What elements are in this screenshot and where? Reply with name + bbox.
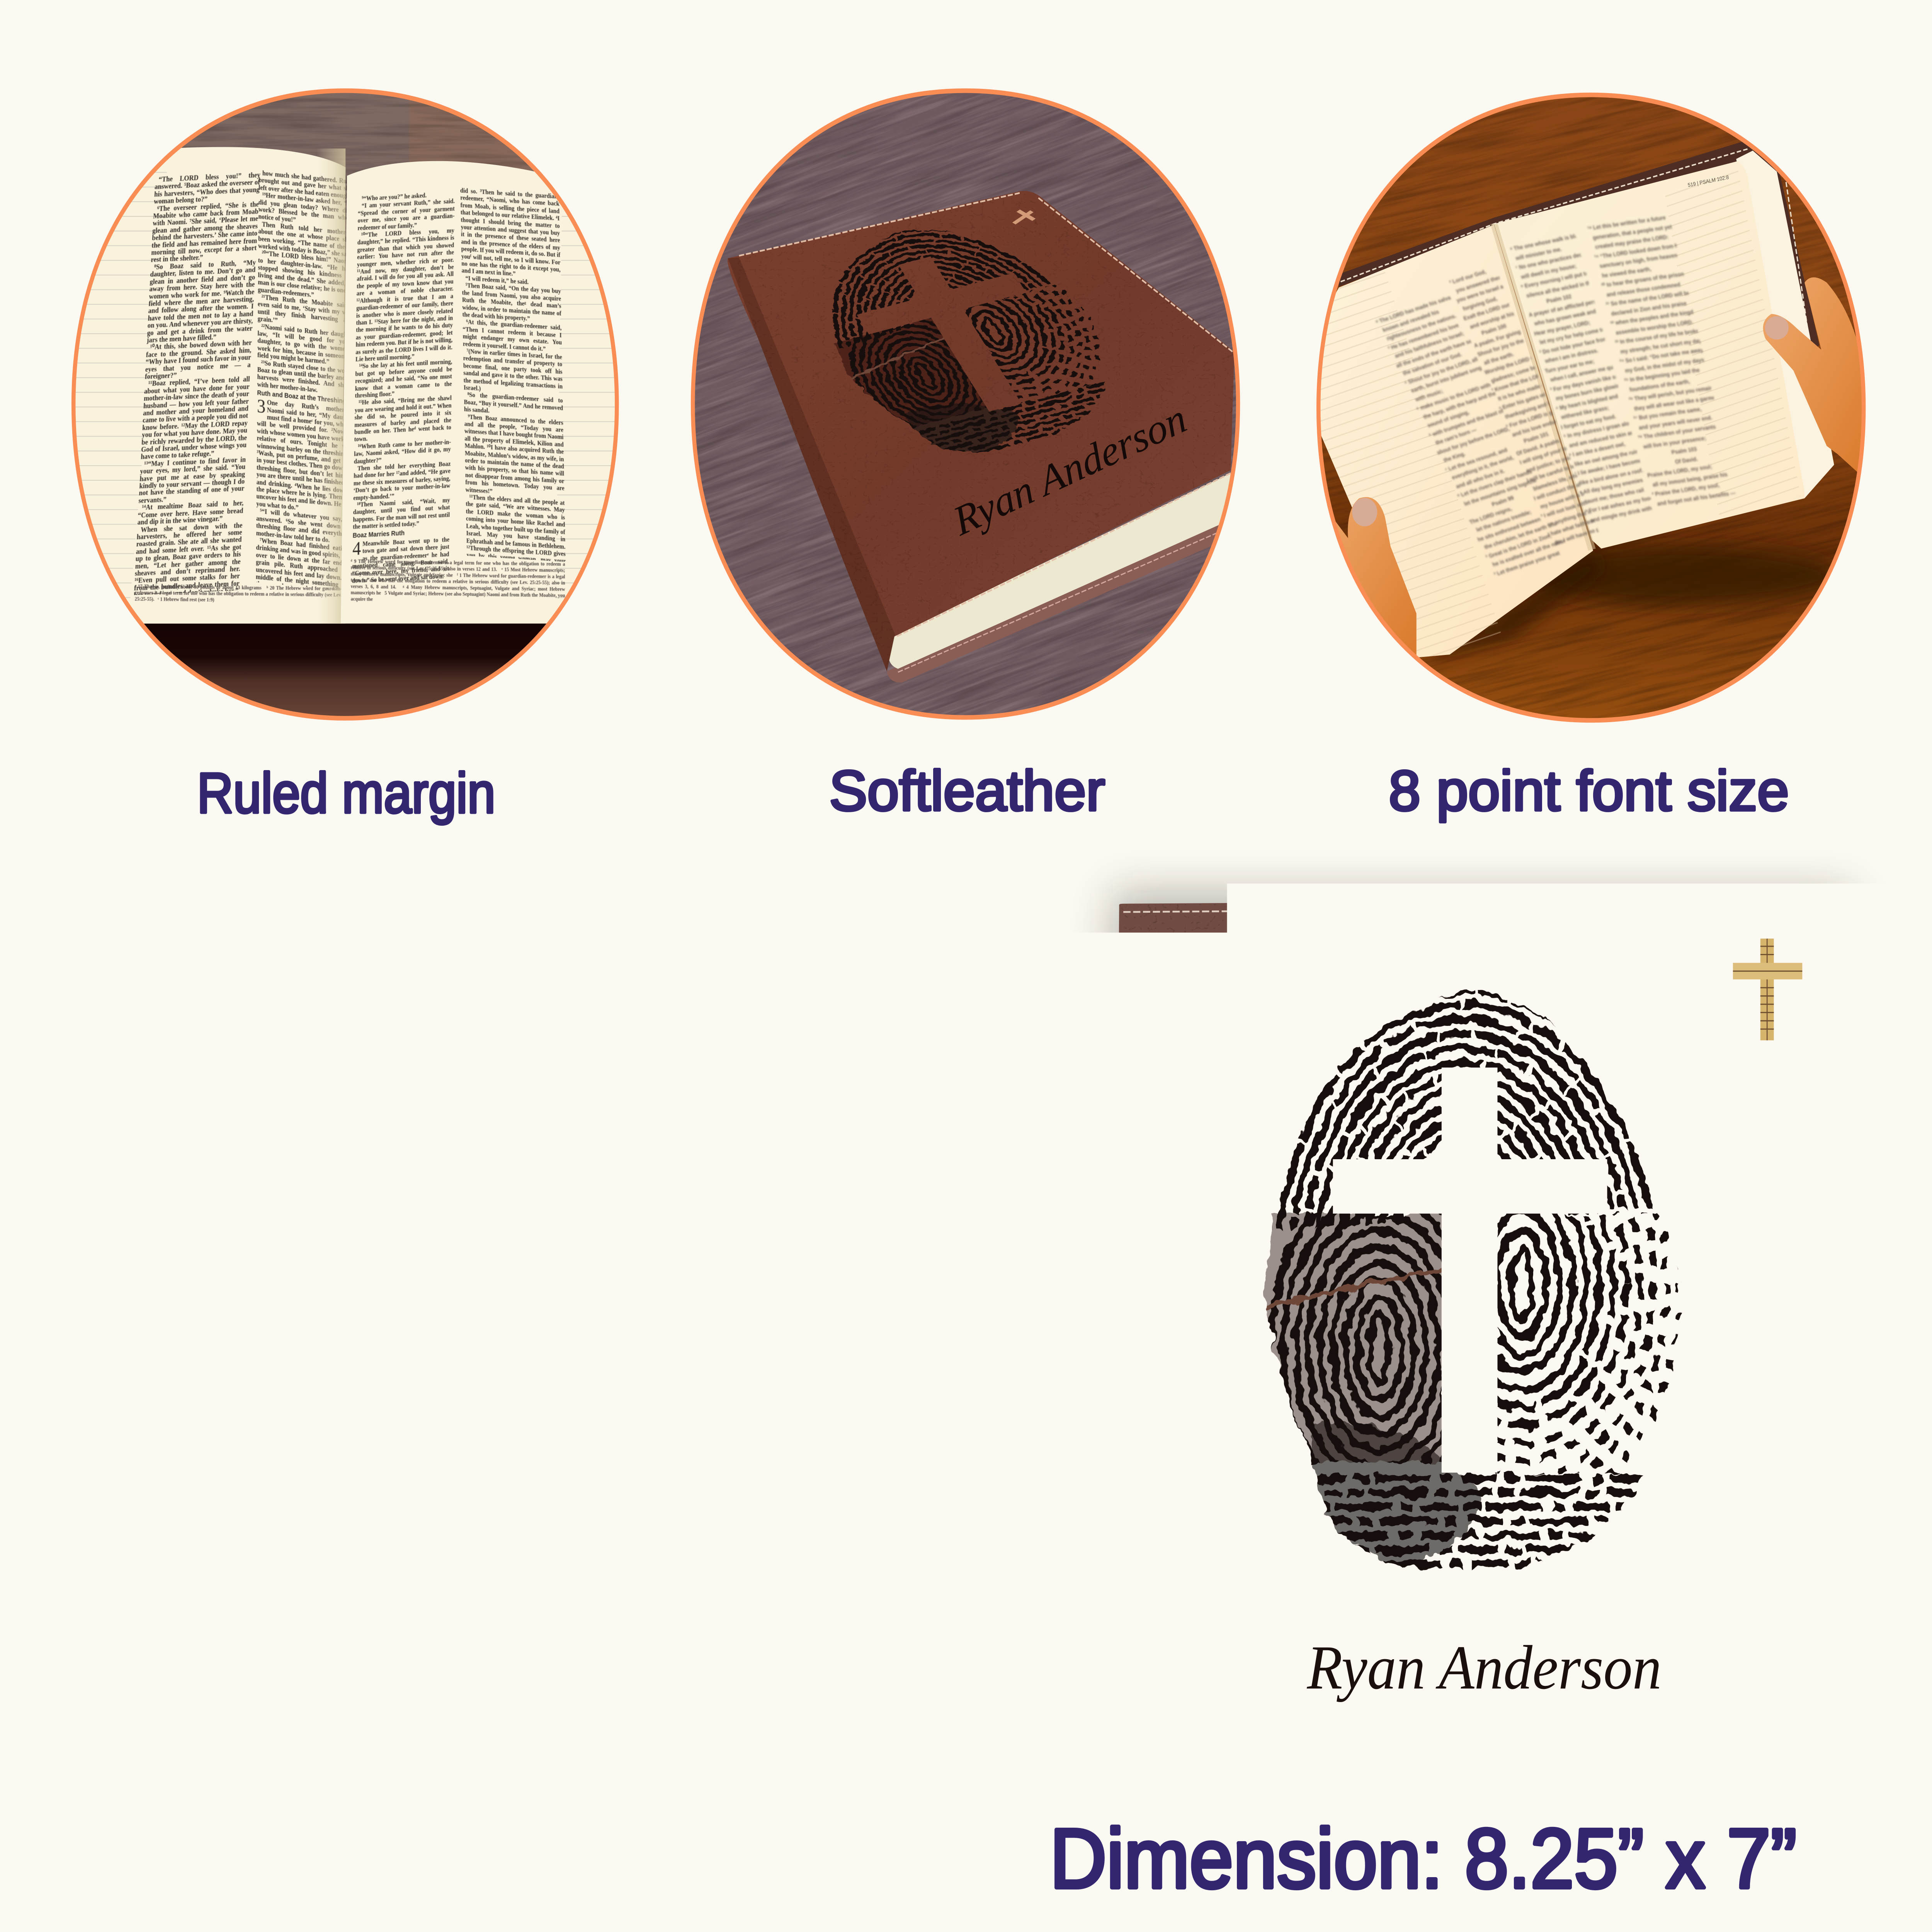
dimension label: Dimension: 8.25” x 7” (1050, 1812, 1797, 1906)
main leather book (1103, 893, 1853, 1780)
gold cross (1733, 939, 1802, 1040)
column A psalm text: let the nations tremble; (1475, 509, 1532, 533)
column B psalm text: ⁵ For the LORD is good (1505, 406, 1562, 430)
column D psalm text: and release those condemned (1606, 281, 1681, 298)
column B psalm text: all the earth. (1483, 350, 1515, 366)
right page footnotes: ᵈ 9 The Hebrew word for guardian-redeemer is a legal term for one who has the obligation to redeem a relative in serious difficulty (see Lev. 25:25-55); also in verses 12 and 13. ᵉ 15 Most Hebrew manuscripts; many Hebrew manuscripts, Vulgate and Syriac she ᶠ 1 The Hebrew word for guardian-redeemer is a legal term for one who has the obligation to redeem a relative in serious difficulty (see Lev. 25:25-55); also in verses 3, 6, 8 and 14. ᵍ 4 Many Hebrew manuscripts, Septuagint, Vulgate and Syriac; most Hebrew manuscripts he 5 Vulgate and Syriac; Hebrew (see also Septuagint) Naomi and from Ruth the Moabite, you acquire the (351, 558, 565, 602)
photo circle: softleather (554, 0, 1374, 869)
column A psalm text: all the ends of the earth have seen (1395, 335, 1479, 369)
column B psalm text: you answered them; (1454, 272, 1505, 294)
column C psalm text: will minister to me. (1515, 245, 1562, 261)
column three text (352, 190, 465, 585)
column D psalm text: all my inmost being, praise his (1652, 471, 1728, 488)
column A psalm text: sound of singing, (1426, 409, 1470, 429)
column B psalm text: I will be careful to lead a (1526, 459, 1585, 484)
photo circle: 8 point font size (1196, 0, 1932, 860)
column three text: Meanwhile Boaz went up to the town gate and sat down there just as the guardian-redeemerᵉ he had mentioned came along. Boaz said, “Come over here, my friend, and sit down.” So he went over and sat down. (352, 536, 449, 585)
column C psalm text: ³ For my days vanish like smoke; (1549, 370, 1631, 393)
column A psalm text: ⁴ Shout for joy to the LORD, all the (1403, 352, 1488, 386)
leather cover strip (1339, 140, 1819, 354)
column two text: ⁵“I will do whatever you say,” Ruth answered. ⁶So she went down to the threshing floor and did everything her mother-in-law told her to do. (256, 508, 362, 544)
column C psalm text: ⁵ In my distress I groan aloud (1563, 418, 1636, 440)
column three text: Then she told her everything Boaz had done for her ¹⁷and added, “He gave me these six measures of barley, saying, ‘Don’t go back to your mother-in-law empty-handed.’” (353, 460, 451, 502)
column A psalm text: everything in it, the world, (1451, 454, 1515, 481)
column B psalm text: Of David. A psalm. (1515, 437, 1561, 457)
caption: softleather: Softleather (829, 759, 1105, 823)
column A psalm text: the salvation of our God. (1401, 351, 1463, 376)
column A psalm text: he is exalted over all the nations. (1491, 536, 1572, 568)
column three text: ¹⁵He also said, “Bring me the shawl you are wearing and hold it out.” When she did so, he poured into it six measures of barley and placed the bundle on her. Then heᵈ went back to town. (354, 395, 452, 443)
leather texture (1103, 893, 1853, 1780)
column C psalm text: ⁷ I lie awake; I have become (1573, 457, 1642, 477)
column one text: ¹⁴At mealtime Boaz said to her, “Come over here. Have some bread and dip it in the wine vinegar.” (137, 499, 244, 526)
column two text: Ruth and Boaz at the Threshing Floor (257, 389, 362, 407)
column A psalm text: The LORD reigns, (1468, 505, 1513, 525)
column B psalm text: ² Lord our God, (1448, 268, 1487, 286)
column D psalm text: assemble to worship the LORD. (1615, 318, 1694, 336)
column B psalm text: gladness; come before him (1490, 357, 1557, 384)
column B psalm text: Worship the LORD with (1483, 352, 1542, 376)
column two text: 3 (257, 395, 265, 417)
column B psalm text: ³ Know that the LORD is God. (1490, 366, 1563, 394)
column B psalm text: I will sing of your love (1519, 443, 1573, 466)
right thumbnail (1765, 316, 1789, 340)
page block (889, 473, 1231, 669)
orange ring (1318, 95, 1864, 720)
feature: journaling: Perfect for journaling (185, 1373, 1005, 1473)
column C psalm text: when I call, answer me quickly. (1549, 361, 1626, 383)
column three text: “I am your servant Ruth,” she said. “Spread the corner of your garment over me, since you are a guardian-redeemer of our family.” (357, 198, 455, 232)
column D psalm text: ¹⁸ Let this be written for a future (1587, 214, 1666, 231)
bullet three (111, 1404, 142, 1435)
column A psalm text: the ram’s horn — (1434, 426, 1478, 446)
column C psalm text: let my cry for help come to you. (1539, 323, 1617, 345)
engraved name: Ryan Anderson (947, 395, 1192, 545)
back cover (887, 521, 1223, 683)
column three text: ¹⁶When Ruth came to her mother-in-law, Naomi asked, “How did it go, my daughter?” (354, 439, 451, 465)
ruled margins (1316, 266, 1502, 658)
column A psalm text: known and revealed his (1381, 308, 1440, 333)
column D psalm text: ²⁴ So I said: “Do not take me away, (1619, 346, 1705, 365)
column A psalm text: ³ He has remembered his love (1387, 321, 1460, 351)
column C psalm text: ⁸ Every morning I will put to (1520, 270, 1589, 290)
column A psalm text: and his faithfulness to Israel; (1393, 330, 1465, 359)
column C psalm text: Turn your ear to me; (1544, 358, 1595, 374)
column C psalm text: my bones burn like glowing (1555, 381, 1624, 401)
column B psalm text: A psalm. For giving grateful (1473, 322, 1541, 349)
column four text: ⁵Then Boaz said, “On the day you buy the land from Naomi, you also acquire Ruth the Moabite, theᵍ dead man’s widow, in order to maintain the name of the dead with his property.” (462, 282, 561, 322)
column D psalm text: and forget not all his benefits — (1656, 489, 1736, 507)
column D psalm text: Praise the LORD, my soul; (1646, 463, 1713, 479)
column B psalm text: ⁴ Enter his gates with (1498, 389, 1551, 412)
column A psalm text: ⁵ make music to the LORD with (1415, 381, 1492, 412)
column D psalm text: Psalm 103 (1671, 446, 1697, 456)
column B psalm text: Psalm 100 (1480, 322, 1507, 336)
column two text (256, 170, 369, 593)
column A psalm text: let the mountains sing together; (1463, 475, 1541, 507)
column two text: ²¹Then Ruth the Moabite said, “He even said to me, ‘Stay with my workers until they finish harvesting all my grain.’” (258, 293, 363, 325)
column D psalm text: my God, in the midst of my days; (1624, 356, 1706, 374)
column three text: 4 (352, 537, 361, 559)
column D psalm text: will live in your presence; (1643, 434, 1707, 450)
column B psalm text: thanksgiving and his courts (1504, 393, 1573, 420)
column D psalm text: my strength; he cut short my days. (1619, 336, 1706, 355)
column D psalm text: ²² when the peoples and the kingdoms (1610, 307, 1704, 327)
photo circle: ruled margin (69, 86, 624, 723)
column B psalm text: Shout for joy to the LORD, (1476, 332, 1542, 358)
column C psalm text: Hear my prayer, LORD; (1533, 319, 1591, 337)
column D psalm text: ²⁷ But you remain the same, (1633, 406, 1702, 422)
page edge right (1736, 151, 1834, 498)
column A psalm text: the harp, with the harp and the (1422, 389, 1497, 420)
brown cover (724, 186, 1238, 676)
column D psalm text: generation, that a people not yet (1592, 223, 1672, 241)
column two text: ¹⁹Her mother-in-law asked her, “Where did you glean today? Where did you work? Blessed be the man who took notice of you!” (259, 191, 364, 224)
column two text: Then Ruth told her mother-in-law about the one at whose place she had been working. “The name of the man I worked with today is Boaz,” she said. (258, 220, 364, 259)
column D psalm text: ¹⁹ “The LORD looked down from his (1594, 241, 1683, 260)
column A psalm text: the cherubim, let the earth shake. (1483, 518, 1565, 550)
column A psalm text: ² Great is the LORD in Zion; (1485, 532, 1552, 560)
column B psalm text: Exalt the LORD our God (1463, 298, 1522, 321)
column three text: ¹⁰“The LORD bless you, my daughter,” he replied. “This kindness is greater than that which you showed earlier: You have not run after the younger men, whether rich or poor. ¹¹And now, my daughter, don’t be afraid. I will do for you all you ask. All the people of my town know that you are a woman of noble character. ¹²Although it is true that I am a guardian-redeemer of our family, there is another who is more closely related than I. ¹³Stay here for the night, and in the morning if he wants to do his duty as your guardian-redeemer, good; let him redeem you. But if he is not willing, as surely as the LORD lives I will do it. Lie here until morning.” (355, 227, 454, 363)
book shadow (1113, 893, 1851, 1770)
column D psalm text: foundations of the earth, (1629, 378, 1690, 393)
column B psalm text: Psalm 101 (1522, 430, 1549, 444)
column four text: ⁷(Now in earlier times in Israel, for the redemption and transfer of property to become final, one party took off his sandal and gave it to the other. This was the method of legalizing transactions in Israel.) (463, 348, 563, 392)
column C psalm text: who has grown weak and (1533, 308, 1597, 327)
column C psalm text: ⁴ My heart is blighted and (1554, 392, 1619, 412)
left page (69, 147, 345, 624)
column C psalm text: like a bird alone on a roof. (1579, 466, 1644, 486)
column B psalm text (1448, 264, 1599, 546)
column D psalm text: ² Praise the LORD, my soul, (1651, 481, 1720, 498)
orange ring (73, 91, 617, 718)
column D psalm text: ²⁰ to hear the groans of the prisoners (1600, 269, 1692, 289)
column C psalm text: and am reduced to skin and (1568, 428, 1637, 449)
orange ring (693, 91, 1238, 718)
column two text: how much she had gathered. Ruth also brought out and gave her what she had left over after she had eaten enough. (259, 170, 364, 200)
column D psalm text: ²³ In the course of my life he broke (1614, 327, 1699, 345)
column one text: ¹³“May I continue to find favor in your eyes, my lord,” she said. “You have put me at ease by speaking kindly to your servant — though I do not have the standing of one of your servants.” (138, 455, 246, 505)
column C psalm text: silence all the wicked in the land; (1526, 276, 1607, 299)
column B psalm text: and his love endures forever; (1511, 410, 1583, 438)
bullet one (111, 1114, 142, 1145)
column A psalm text: ⁶ with trumpets and the blast of (1427, 407, 1504, 438)
left page footnotes: ᵃ 17 That is, probably about 30 pounds or about 13 kilograms ᵇ 20 The Hebrew word for guardian-redeemer is a legal term for one who has the obligation to redeem a relative in serious difficulty (see Lev. 25:25-55). ᶜ 1 Hebrew find rest (see 1:9) (135, 583, 342, 603)
column four text: ⁸So the guardian-redeemer said to Boaz, “Buy it yourself.” And he removed his sandal. (464, 391, 563, 415)
shadow under book (1527, 546, 1838, 605)
column one text: “The LORD bless you!” they answered. ⁵Boaz asked the overseer of his harvesters, “Who does that young woman belong to?” (154, 171, 260, 206)
column D psalm text: sanctuary on high, from heaven (1599, 252, 1678, 269)
right page (1494, 161, 1804, 549)
column one text: ⁶The overseer replied, “She is the Moabite who came back from Moab with Naomi. ⁷She said, ‘Please let me glean and gather among the sheaves behind the harvesters.’ She came into the field and has remained here from morning till now, except for a short rest in the shelter.” (151, 200, 259, 264)
running head: 519 | PSALM 102:8 (1687, 174, 1729, 188)
column three text: ⁹“Who are you?” he asked. (362, 192, 427, 202)
column four text: ⁶At this, the guardian-redeemer said, “Then I cannot redeem it because I might endanger my own estate. You redeem it yourself. I cannot do it.” (463, 318, 562, 352)
column A psalm text: ⁸ Let the rivers clap their hands, (1456, 468, 1534, 499)
right page (341, 161, 624, 624)
column B psalm text: and justice; to you, LORD, (1525, 448, 1590, 474)
feature list (111, 1078, 1007, 1473)
column two text: One day Ruth’s mother-in-law Naomi said to her, “My daughter, I must find a homeᶜ for you, where you will be well provided for. ²Now Boaz, with whose women you have worked, is a relative of ours. Tonight he will be winnowing barley on the threshing floor. ³Wash, put on perfume, and get dressed in your best clothes. Then go down to the threshing floor, but don’t let him know you are there until he has finished eating and drinking. ⁴When he lies down, note the place where he is lying. Then go and uncover his feet and lie down. He will tell you what to do.” (256, 399, 362, 512)
column D psalm text: Of David. (1674, 455, 1698, 465)
column C psalm text: ⁶ I am like a desert owl, (1568, 440, 1626, 458)
column four text: “I will redeem it,” he said. (465, 275, 529, 286)
column A psalm text: ⁷ Let the sea resound, and (1444, 446, 1508, 473)
column one text: ¹¹Boaz replied, “I’ve been told all about what you have done for your mother-in-law since the death of your husband — how you left your father and mother and your homeland and came to live with a people you did not know before. ¹²May the LORD repay you for what you have done. May you be richly rewarded by the LORD, the God of Israel, under whose wings you have come to take refuge.” (141, 375, 250, 461)
fingerprint with cross (1237, 979, 1686, 1612)
column C psalm text: A prayer of an afflicted person (1528, 296, 1603, 318)
feature: smyth-sewn: Smyth-sewn binding (177, 1225, 994, 1325)
column four text: did so. ³Then he said to the guardian-redeemer, “Naomi, who has come back from Moab, is selling the piece of land that belonged to our relative Elimelek. ⁴I thought I should bring the matter to your attention and suggest that you buy it in the presence of these seated here and in the presence of the elders of my people. If you will redeem it, do so. But if youᶠ will not, tell me, so I will know. For no one has the right to do it except you, and I am next in line.” (460, 187, 561, 278)
column D psalm text: created may praise the LORD: (1594, 233, 1669, 250)
column D psalm text: ²¹ So the name of the LORD will be (1605, 289, 1690, 308)
left thumbnail (1352, 498, 1377, 526)
column A psalm text: the King. (1442, 450, 1466, 463)
caption: font size: 8 point font size (1389, 759, 1789, 823)
column two text: ²⁰“The LORD bless him!” Naomi said to her daughter-in-law. “He has not stopped showing his kindness to the living and the dead.” She added, “That man is our close relative; he is one of our guardian-redeemers.” (258, 250, 364, 299)
caption: ruled margin: Ruled margin (197, 762, 495, 825)
column A psalm text: with music; (1414, 388, 1444, 403)
column D psalm text: and your years will never end. (1638, 414, 1713, 431)
column C psalm text: Psalm 102 (1546, 293, 1572, 304)
column B psalm text: and worship at his holy (1469, 306, 1527, 330)
cover (1112, 899, 1847, 1772)
column A psalm text: and all who live in it. (1454, 467, 1505, 490)
engraved name: Ryan Anderson (1307, 1633, 1662, 1702)
right hand (1763, 277, 1866, 480)
column C psalm text: ⁸ All day long my enemies (1579, 476, 1644, 496)
column C psalm text: ⁷ No one who practices deceit (1515, 250, 1588, 271)
fingerprint cross (762, 196, 1160, 493)
column D psalm text: ²⁶ They will perish, but you remain; (1628, 384, 1715, 403)
column B psalm text: I will conduct the affairs of (1533, 476, 1598, 502)
small gold cross (1006, 207, 1040, 228)
column D psalm text: they will all wear out like a garment. (1633, 393, 1722, 412)
column C psalm text: I forget to eat my food. (1560, 413, 1617, 430)
column three text: ¹⁴So she lay at his feet until morning, but got up before anyone could be recognized; and he said, “No one must know that a woman came to the threshing floor.” (355, 358, 452, 400)
left hand (1316, 496, 1417, 655)
yellow wave footer (2, 1713, 1932, 1932)
column two text: ²²Naomi said to Ruth her daughter-in-law, “It will be good for you, my daughter, to go with the women who work for him, because in someone else’s field you might be harmed.” (257, 323, 363, 366)
column C psalm text: taunt me; those who rail (1584, 486, 1645, 505)
column A psalm text: shout for joy before the LORD, (1435, 425, 1510, 456)
column D psalm text: he viewed the earth, (1601, 265, 1652, 279)
column C psalm text: will dwell in my house; (1520, 262, 1577, 280)
column C psalm text: when I am in distress. (1544, 347, 1599, 364)
column B psalm text: forgiving God, (1462, 295, 1498, 312)
column C psalm text: withered like grass; (1560, 404, 1609, 420)
column D psalm text: ²⁸ The children of your servants (1638, 423, 1716, 440)
column three text: Boaz Marries Ruth (353, 529, 405, 539)
column A psalm text: righteousness to the nations. (1385, 313, 1457, 342)
column four text (460, 187, 574, 562)
column D psalm text: ²⁵ In the beginning you laid the (1624, 366, 1700, 384)
column B psalm text: you were to Israel a (1455, 283, 1504, 304)
column A psalm text (1374, 293, 1580, 599)
column C psalm text: like an owl among the ruins. (1573, 447, 1643, 467)
column B psalm text: It is he who made us, (1497, 380, 1549, 402)
column A psalm text: earth, burst into jubilant song (1410, 364, 1483, 394)
feature: words of Jesus: Words of Jesus in red (181, 1078, 1007, 1179)
column three text: ¹⁸Then Naomi said, “Wait, my daughter, until you find out what happens. For the man will not rest until the matter is settled today.” (353, 497, 450, 531)
column C psalm text (1509, 231, 1657, 536)
column A psalm text: he sits enthroned between (1476, 515, 1542, 543)
column D psalm text: declared in Zion and his praise (1610, 299, 1687, 317)
column two text: ²³So Ruth stayed close to the women of Boaz to glean until the barley and wheat harvests were finished. And she lived with her mother-in-law. (257, 359, 363, 394)
column D psalm text (1587, 212, 1740, 519)
column C psalm text: ⁹ For I eat ashes as my food (1584, 494, 1654, 515)
bullet two (111, 1259, 142, 1290)
column C psalm text: ² Do not hide your face from me (1539, 333, 1617, 355)
column one text (134, 171, 266, 595)
column A psalm text: ³ Let them praise your great (1493, 549, 1561, 577)
column one text: ⁸So Boaz said to Ruth, “My daughter, listen to me. Don’t go and glean in another field and don’t go away from here. Stay here with the women who work for me. ⁹Watch the field where the men are harvesting, and follow along after the women. I have told the men not to lay a hand on you. And whenever you are thirsty, go and get a drink from the water jars the men have filled.” (146, 258, 256, 344)
column one text: ¹⁰At this, she bowed down with her face to the ground. She asked him, “Why have I found such favor in your eyes that you notice me — a foreigner?” (145, 338, 252, 381)
stitching (1118, 907, 1840, 1765)
left page (1316, 225, 1593, 658)
column B psalm text: blameless life, when will (1532, 468, 1592, 492)
column A psalm text: Psalm 99 (1490, 494, 1515, 507)
column four text: ⁹Then Boaz announced to the elders and all the people, “Today you are witnesses that I have bought from Naomi all the property of Elimelek, Kilion and Mahlon. ¹⁰I have also acquired Ruth the Moabite, Mahlon’s widow, as my wife, in order to maintain the name of the dead with his property, so that his name will not disappear from among his family or from his hometown. Today you are witnesses!” (464, 413, 565, 495)
